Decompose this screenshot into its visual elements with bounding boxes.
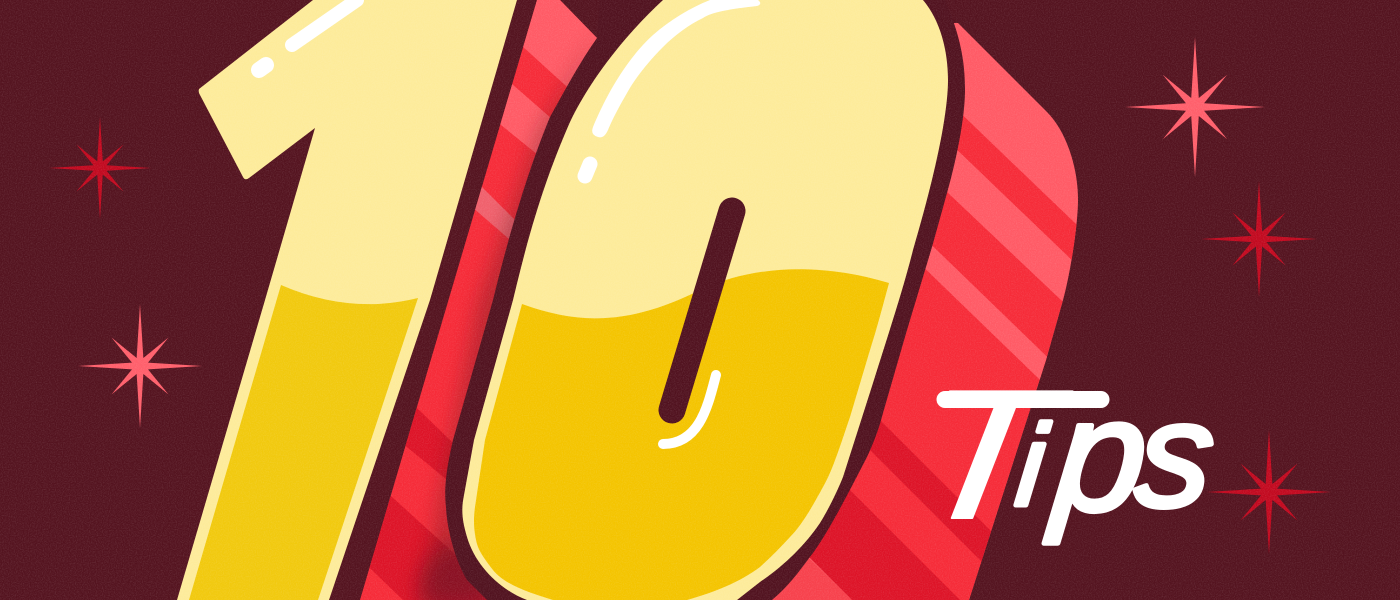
star: dark red bottom right	[1207, 430, 1331, 554]
letters ips: p	[1044, 365, 1156, 544]
numeral 0: counter slot	[672, 211, 732, 410]
numeral 1	[177, 0, 517, 600]
numeral 1: dot highlight	[259, 65, 266, 70]
numeral 0	[445, 0, 965, 600]
numeral 0: top arc highlight	[592, 0, 760, 137]
letters ips: s	[1130, 370, 1222, 538]
numeral 0: dark outline	[445, 0, 965, 600]
numeral 1: long highlight	[292, 0, 357, 45]
star: pink left	[78, 304, 202, 428]
star: pink top right	[1125, 37, 1265, 177]
star: dark red middle right	[1201, 181, 1317, 297]
numeral 0: yellow fill	[474, 269, 889, 600]
title: Tips	[901, 352, 1223, 557]
letter T: T	[901, 352, 1079, 557]
numeral 0: cream top	[462, 0, 948, 600]
crossbar flourish	[945, 391, 1101, 408]
extruded side between digits	[360, 0, 597, 600]
numeral 1: yellow fill	[189, 285, 418, 600]
numeral 1: cream top	[177, 0, 517, 600]
star: dark red left	[49, 117, 151, 219]
numeral 0: dot highlight	[585, 164, 590, 176]
extruded side of numeral 0	[772, 23, 1078, 600]
letters ips: i	[1011, 402, 1054, 530]
numeral 0: lower curve highlight	[663, 375, 716, 444]
